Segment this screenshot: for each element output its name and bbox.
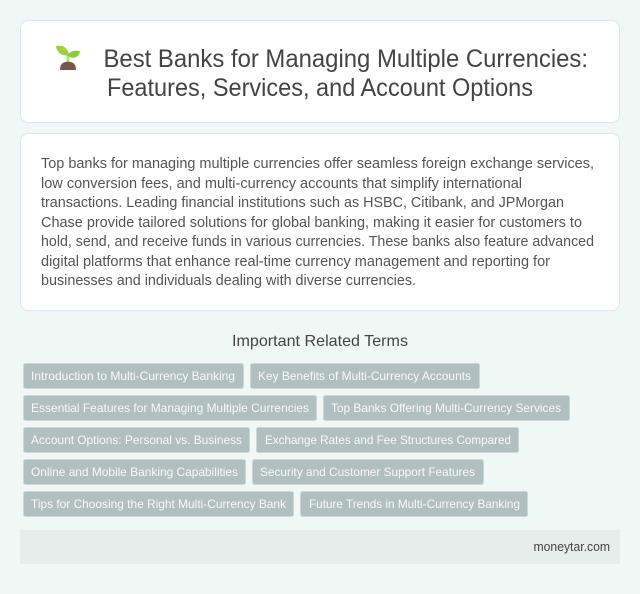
icon: sprout (56, 46, 80, 70)
chip (250, 364, 480, 388)
chip (300, 492, 528, 516)
chip: Essential Features for Managing Multiple Currencies (31, 401, 309, 415)
chip: Future Trends in Multi-Currency Banking (309, 497, 520, 511)
heading: related terms: Important Related Terms (232, 333, 408, 350)
chip (24, 364, 244, 388)
panel: description text: businesses and individuals dealing with diverse currencies. (41, 273, 416, 289)
chip (24, 460, 246, 484)
chip: Tips for Choosing the Right Multi-Currency Bank (31, 497, 287, 511)
chip: Security and Customer Support Features (260, 465, 475, 479)
footer bar: moneytar.com (534, 539, 610, 554)
chip: Online and Mobile Banking Capabilities (31, 465, 238, 479)
chip: Exchange Rates and Fee Structures Compared (265, 433, 511, 447)
title: Best Banks for Managing Multiple Currencies: (104, 45, 588, 73)
chip: Account Options: Personal vs. Business (31, 433, 242, 447)
panel: description text: Chase provide tailored solutions for global banking, making it easier for customers to (41, 215, 582, 231)
chip (24, 396, 316, 420)
chip (24, 428, 250, 452)
chip: Key Benefits of Multi-Currency Accounts (258, 369, 471, 383)
title (104, 45, 588, 102)
panel: description text: transactions. Leading financial institutions such as HSBC, Citibank, and JPMorgan (41, 195, 564, 211)
chip (256, 428, 518, 452)
panel: description text: low conversion fees, and multi-currency accounts that simplify international (41, 176, 522, 192)
title: Features, Services, and Account Options (107, 74, 533, 102)
panel: description text: hold, send, and receive funds in various currencies. These banks also feature advanced (41, 234, 594, 250)
chip: Top Banks Offering Multi-Currency Services (331, 401, 561, 415)
panel: description text (20, 134, 620, 310)
chip (252, 460, 484, 484)
chip (24, 492, 294, 516)
chip (324, 396, 570, 420)
chip group: related terms (24, 364, 570, 516)
panel: description text: Top banks for managing multiple currencies offer seamless foreign exchange services, (41, 156, 594, 172)
chip: Introduction to Multi-Currency Banking (31, 369, 235, 383)
panel: description text: digital platforms that enhance real-time currency management and reporting for (41, 254, 550, 270)
footer bar (20, 530, 620, 564)
panel: title card (20, 20, 620, 122)
